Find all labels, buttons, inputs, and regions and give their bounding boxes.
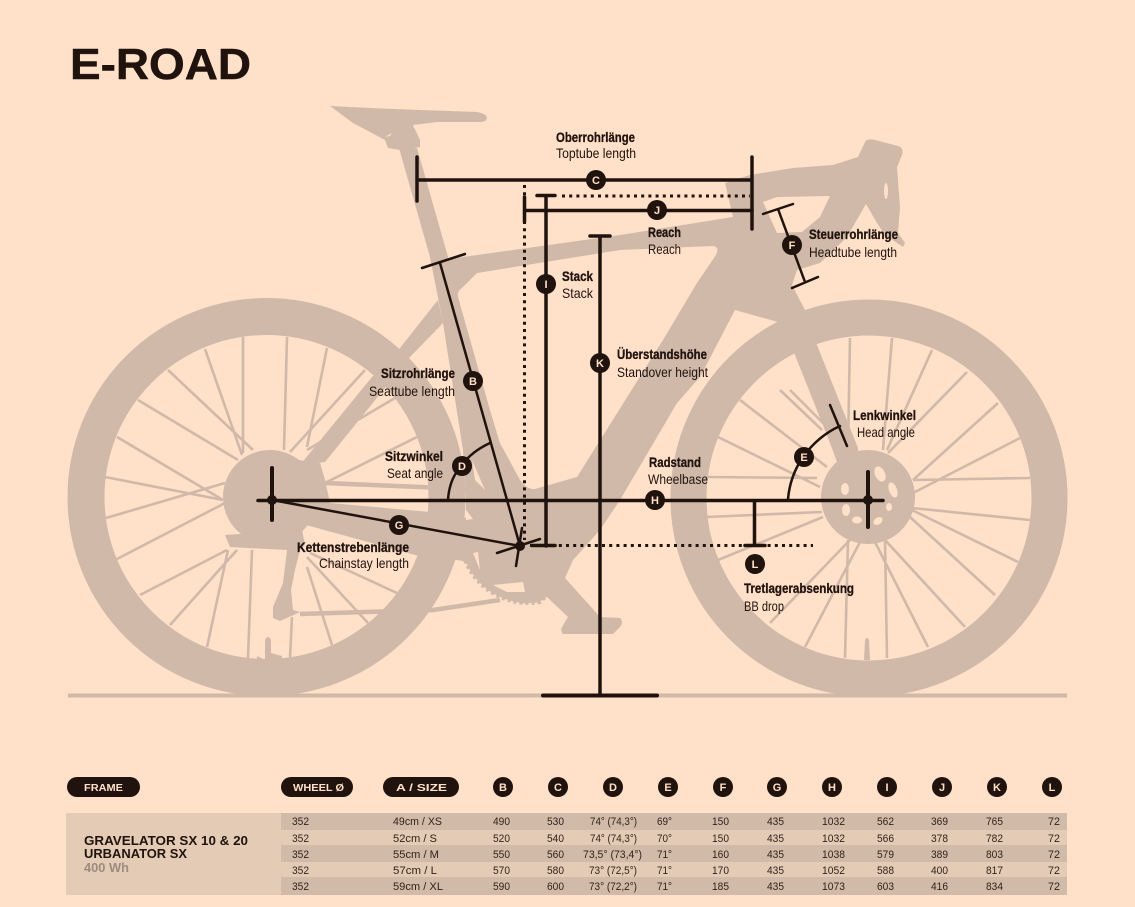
row L: 435 (767, 865, 784, 877)
F: headtube length: Headtube length (809, 244, 897, 260)
row L: 570 (493, 865, 510, 877)
pill: frame: FRAME (84, 782, 123, 794)
row XL: 834 (986, 881, 1003, 893)
row M (292, 849, 1060, 861)
row L: 73° (72,5°) (589, 865, 637, 877)
row L: 71° (657, 865, 672, 877)
frame name: GRAVELATOR SX 10 & 20 (84, 834, 248, 848)
row XS: 150 (712, 816, 729, 828)
I: stack: I (544, 279, 548, 291)
column letter badges: D (609, 782, 617, 794)
column letter badges: B (499, 782, 507, 794)
row L: 1052 (822, 865, 845, 877)
row XS: 352 (292, 816, 309, 828)
row S (292, 833, 1060, 845)
G: chainstay length: G (395, 520, 403, 532)
row XS: 562 (877, 816, 894, 828)
row S: 52cm / S (393, 833, 437, 845)
row XS: 49cm / XS (393, 816, 442, 828)
H: wheelbase: Wheelbase (648, 471, 708, 487)
row M: 55cm / M (393, 849, 439, 861)
bike silhouette (68, 106, 1067, 696)
row XL: 590 (493, 881, 510, 893)
row S: 566 (877, 833, 894, 845)
frame and components (225, 106, 905, 634)
L: BB drop: Tretlagerabsenkung (744, 580, 854, 596)
D: seat angle: Sitzwinkel (385, 448, 443, 464)
column letter badges: F (720, 782, 727, 794)
row L: 72 (1048, 865, 1060, 877)
rear derailleur (225, 530, 305, 621)
I: stack: Stack (562, 268, 593, 284)
F: headtube length: F (789, 240, 796, 252)
row S: 72 (1048, 833, 1060, 845)
D: seat angle: D (458, 461, 466, 473)
pill: frame (67, 777, 140, 797)
row S: 540 (547, 833, 564, 845)
row XL: 73° (72,2°) (589, 881, 637, 893)
row XL: 1073 (822, 881, 845, 893)
K: standover height: Überstandshöhe (617, 346, 707, 362)
row XL: 435 (767, 881, 784, 893)
row S: 70° (657, 833, 672, 845)
E: head angle: Head angle (857, 424, 915, 440)
row S: 74° (74,3°) (590, 833, 637, 845)
row L: 588 (877, 865, 894, 877)
B: seattube length: Seattube length (369, 383, 455, 399)
column letter badges: H (828, 782, 836, 794)
row M: 803 (986, 849, 1003, 861)
column letter badges: C (554, 782, 562, 794)
pill: wheel diameter (281, 777, 353, 797)
row M: 72 (1048, 849, 1060, 861)
F: headtube length: Steuerrohrlänge (809, 226, 898, 242)
row XS: 369 (931, 816, 948, 828)
row S: 378 (931, 833, 948, 845)
L: BB drop: L (752, 559, 759, 571)
title: E-ROAD (70, 40, 251, 89)
row S: 1032 (822, 833, 845, 845)
row M: 1038 (822, 849, 845, 861)
C: toptube length: Toptube length (556, 145, 636, 161)
row XL (292, 881, 1060, 893)
row L: 580 (547, 865, 564, 877)
frame name: URBANATOR SX (84, 847, 188, 861)
row XS (292, 816, 1060, 828)
row L: 817 (986, 865, 1003, 877)
row M: 389 (931, 849, 948, 861)
frame name (84, 834, 248, 875)
column letter badges: I (885, 782, 889, 794)
row L: 57cm / L (393, 865, 437, 877)
J: reach: J (654, 205, 660, 217)
rear wheel (86, 316, 447, 678)
G: chainstay length: Kettenstrebenlänge (297, 539, 409, 555)
H: wheelbase: Radstand (649, 454, 701, 470)
row XS: 530 (547, 816, 564, 828)
E: head angle: E (800, 452, 808, 464)
G: chainstay length: Chainstay length (319, 555, 409, 571)
D: seat angle: Seat angle (387, 465, 443, 481)
row L: 400 (931, 865, 948, 877)
row M: 550 (493, 849, 510, 861)
row M: 560 (547, 849, 564, 861)
column letter badges: J (939, 782, 945, 794)
row XS: 74° (74,3°) (590, 816, 637, 828)
H: wheelbase: H (651, 495, 659, 507)
dimension overlay (258, 129, 916, 696)
B: seattube length: Sitzrohrlänge (381, 365, 455, 381)
row M: 73,5° (73,4°) (583, 849, 642, 861)
G: chainstay length (272, 500, 540, 571)
row L (292, 865, 1060, 877)
row S: 782 (986, 833, 1003, 845)
K: standover height: K (596, 358, 604, 370)
row XS: 69° (657, 816, 672, 828)
F: headtube length (763, 204, 898, 288)
row S: 435 (767, 833, 784, 845)
table background rows (66, 813, 1067, 895)
ground line (68, 694, 1067, 698)
D: seat angle (385, 443, 490, 500)
column letter badges: K (993, 782, 1001, 794)
row XL: 185 (712, 881, 729, 893)
row M: 352 (292, 849, 309, 861)
pill: size: A / SIZE (396, 782, 447, 794)
C: toptube length: C (592, 175, 600, 187)
row S: 352 (292, 833, 309, 845)
L: BB drop (744, 501, 854, 614)
I: stack (532, 196, 594, 546)
row XS: 72 (1048, 816, 1060, 828)
B: seattube length (369, 254, 520, 546)
main frame, handlebar and crank (440, 139, 905, 634)
pill: size (383, 777, 459, 797)
row S: 150 (712, 833, 729, 845)
I: stack: Stack (562, 285, 594, 301)
row M: 435 (767, 849, 784, 861)
row XS: 490 (493, 816, 510, 828)
geometry table (66, 813, 1067, 895)
frame openings (385, 122, 888, 592)
front wheel (688, 318, 1050, 678)
column letter badges (493, 777, 1062, 797)
row XL: 600 (547, 881, 564, 893)
row XS: 435 (767, 816, 784, 828)
row XL: 71° (657, 881, 672, 893)
row XL: 72 (1048, 881, 1060, 893)
seat stay (300, 300, 443, 465)
column letter badges: E (664, 782, 672, 794)
row M: 71° (657, 849, 672, 861)
C: toptube length: Oberrohrlänge (556, 129, 635, 145)
chain stay and dropout (295, 460, 490, 565)
row M: 579 (877, 849, 894, 861)
row L: 170 (712, 865, 729, 877)
H: wheelbase (258, 454, 883, 527)
frame name: 400 Wh (84, 861, 129, 875)
row XL: 352 (292, 881, 309, 893)
fork (785, 310, 860, 470)
saddle (330, 106, 487, 150)
E: head angle: Lenkwinkel (853, 407, 916, 423)
table header (67, 777, 1062, 797)
J: reach (524, 197, 752, 257)
C: toptube length (417, 129, 752, 229)
J: reach: Reach (648, 241, 681, 257)
row S: 520 (493, 833, 510, 845)
column letter badges: L (1049, 782, 1056, 794)
row L: 352 (292, 865, 309, 877)
L: BB drop: BB drop (744, 598, 784, 614)
row XL: 59cm / XL (393, 881, 443, 893)
row XS: 1032 (822, 816, 845, 828)
seat tube (399, 148, 527, 560)
K: standover height: Standover height (617, 364, 708, 380)
chain (300, 482, 500, 614)
pill: wheel diameter: WHEEL Ø (293, 782, 344, 794)
chainring (460, 500, 560, 603)
row XL: 603 (877, 881, 894, 893)
dotted reference lines (524, 185, 813, 546)
row XS: 765 (986, 816, 1003, 828)
K: standover height (543, 236, 708, 696)
row XL: 416 (931, 881, 948, 893)
J: reach: Reach (648, 224, 681, 240)
row M: 160 (712, 849, 729, 861)
B: seattube length: B (469, 376, 477, 388)
E: head angle (788, 405, 916, 499)
column letter badges: G (773, 782, 781, 794)
